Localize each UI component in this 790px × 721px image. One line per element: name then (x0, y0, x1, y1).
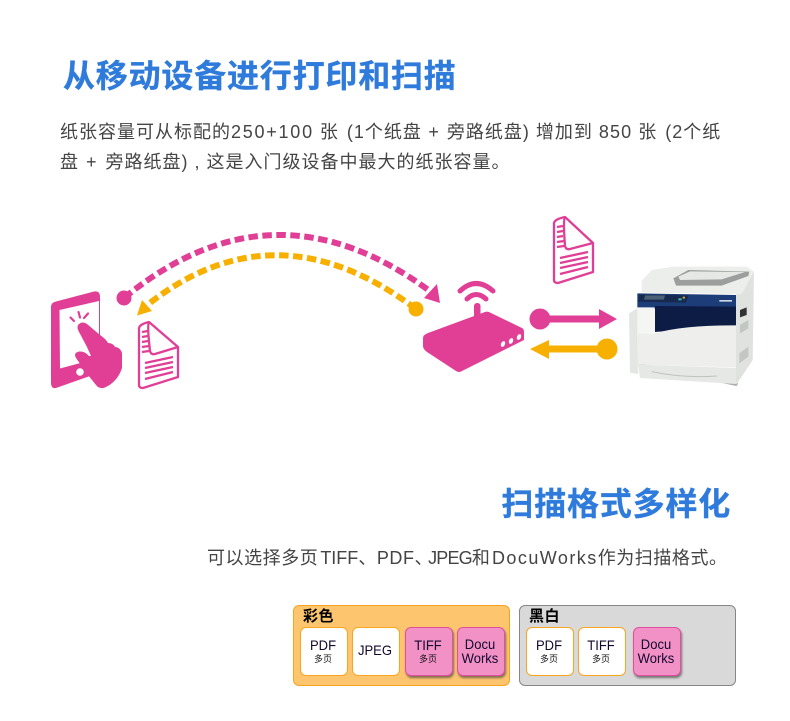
format: JPEG: JPEG (358, 642, 392, 658)
format: TIFF multipage: 多页 (592, 654, 610, 664)
format: DocuWorks (457, 627, 505, 676)
icon: document near tablet (139, 322, 178, 388)
panel: monochrome formats (519, 605, 736, 686)
text block: paper capacity description: 纸张容量可从标配的250+100 张 (1个纸盘 + 旁路纸盘) 增加到 850 张 (2个纸 盘 + 旁路纸盘) , 这是入门级设备中最大的纸张容量。 (60, 122, 721, 172)
format: DocuWorks: Docu (465, 636, 495, 652)
icon: document above router (554, 217, 593, 283)
format: PDF multipage: PDF (310, 637, 336, 653)
heading: colour: 彩色 (303, 608, 334, 625)
title: mobile print and scan: 从移动设备进行打印和扫描 (63, 58, 457, 94)
format: TIFF multipage: 多页 (419, 654, 437, 664)
arrow: pink dashed arc to router (116, 235, 440, 306)
diagram: mobile printing workflow (51, 216, 754, 390)
arrow: yellow from printer (530, 338, 618, 360)
arrow: yellow dashed arc to tablet (137, 255, 424, 316)
heading: monochrome: 黑白 (529, 608, 560, 625)
format: PDF multipage: PDF (536, 637, 562, 653)
format: TIFF multipage (405, 627, 453, 676)
panel: colour formats (293, 605, 510, 686)
arrow: pink to printer (530, 308, 617, 330)
format: PDF multipage: 多页 (314, 654, 332, 664)
format: DocuWorks (633, 627, 681, 676)
format: PDF multipage: 多页 (540, 654, 558, 664)
format: TIFF multipage (578, 627, 626, 676)
format: PDF multipage (300, 627, 348, 676)
format: PDF multipage (526, 627, 574, 676)
format: TIFF multipage: TIFF (414, 637, 442, 653)
icon: tablet with tapping hand (51, 291, 122, 388)
format: DocuWorks: Works (638, 650, 674, 666)
format: TIFF multipage: TIFF (587, 637, 615, 653)
title: diverse scan formats: 扫描格式多样化 (501, 486, 731, 522)
text block: scan format description: 可以选择多页TIFF、PDF、JPEG和DocuWorks作为扫描格式。 (207, 548, 728, 568)
format: DocuWorks: Works (462, 650, 498, 666)
image: multifunction printer (629, 267, 754, 386)
format: DocuWorks: Docu (641, 636, 671, 652)
icon: wifi router (423, 284, 524, 372)
format: JPEG (352, 627, 400, 676)
